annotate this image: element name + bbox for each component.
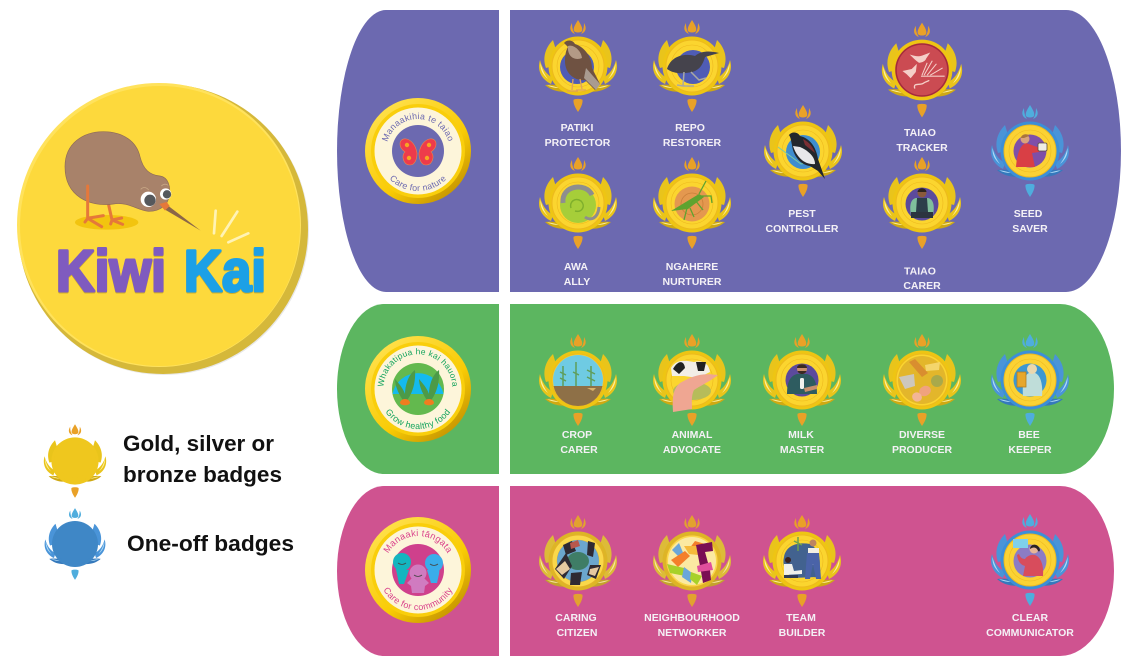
badge: team builder — [763, 515, 841, 639]
label: ADVOCATE — [663, 444, 721, 456]
badge: bee keeper — [991, 334, 1069, 456]
label: CARER — [903, 280, 941, 292]
badge: taiao carer — [883, 157, 961, 292]
badge: crop carer — [539, 334, 617, 456]
label: KEEPER — [1008, 444, 1052, 456]
label: TRACKER — [896, 142, 948, 154]
label: AWA — [564, 261, 588, 273]
label: NEIGHBOURHOOD — [644, 612, 740, 624]
wordmark: Kiwi — [56, 239, 166, 304]
medallion: care for community — [365, 517, 471, 623]
badge: pest controller — [764, 105, 842, 235]
medallion: care for nature — [365, 98, 471, 204]
label: TAIAO — [904, 266, 936, 278]
medallion: care for nature: Manaakihia te taiao — [382, 112, 452, 142]
badge: taiao tracker — [882, 23, 962, 154]
medallion: care for community: Manaaki tāngata — [383, 529, 451, 554]
panel: grow healthy food — [337, 304, 1114, 474]
label: RESTORER — [663, 137, 721, 149]
label: CROP — [562, 429, 592, 441]
label: TEAM — [786, 612, 816, 624]
medallion: grow healthy food: Grow healthy food — [386, 408, 450, 430]
legend: one-off badges — [45, 508, 294, 580]
badge: patiki protector — [539, 20, 617, 149]
label: CITIZEN — [557, 627, 597, 639]
label: CARING — [555, 612, 597, 624]
badge: repo restorer — [653, 20, 731, 149]
medallion: grow healthy food: Whakatipua he kai hauora — [378, 348, 457, 387]
label: REPO — [675, 122, 705, 134]
label: PATIKI — [561, 122, 594, 134]
label: NETWORKER — [658, 627, 727, 639]
label: NGAHERE — [666, 261, 718, 273]
legend text: one-off: One-off badges — [127, 531, 294, 556]
medallion: care for community: Care for community — [384, 588, 452, 610]
badge: caring citizen — [539, 515, 617, 639]
legend text: gold: Gold, silver or — [123, 431, 274, 456]
icon: blue badge — [45, 508, 105, 580]
label: PROTECTOR — [545, 137, 611, 149]
wordmark: Kai — [184, 239, 266, 304]
icon: kiwi bird — [65, 132, 248, 242]
badge: awa ally — [539, 157, 617, 288]
label: CARER — [560, 444, 598, 456]
label: DIVERSE — [899, 429, 945, 441]
badge: diverse producer — [883, 334, 961, 456]
label: BEE — [1018, 429, 1040, 441]
label: TAIAO — [904, 127, 936, 139]
label: CONTROLLER — [766, 223, 839, 235]
label: MASTER — [780, 444, 825, 456]
legend text: gold: bronze badges — [123, 462, 282, 487]
label: SEED — [1014, 208, 1043, 220]
label: PEST — [788, 208, 816, 220]
label: PRODUCER — [892, 444, 952, 456]
badge: animal advocate — [653, 334, 731, 456]
badge: ngahere nurturer — [653, 157, 731, 288]
label: NURTURER — [663, 276, 722, 288]
badge: milk master — [763, 334, 841, 456]
badge: clear communicator — [986, 514, 1074, 639]
label: BUILDER — [779, 627, 826, 639]
label: ANIMAL — [672, 429, 713, 441]
logo: Kiwi Kai — [17, 83, 309, 375]
medallion: grow healthy food — [365, 336, 471, 442]
panel: care for nature — [337, 10, 1121, 292]
label: CLEAR — [1012, 612, 1048, 624]
panel: care for community — [337, 486, 1114, 656]
legend: gold, silver or bronze badges — [44, 424, 282, 498]
icon: gold badge — [44, 424, 106, 498]
label: MILK — [788, 429, 814, 441]
label: ALLY — [564, 276, 590, 288]
badge: seed saver — [991, 105, 1069, 235]
label: COMMUNICATOR — [986, 627, 1074, 639]
label: SAVER — [1012, 223, 1048, 235]
badge: neighbourhood networker — [644, 515, 740, 639]
medallion: care for nature: Care for nature — [390, 176, 446, 191]
